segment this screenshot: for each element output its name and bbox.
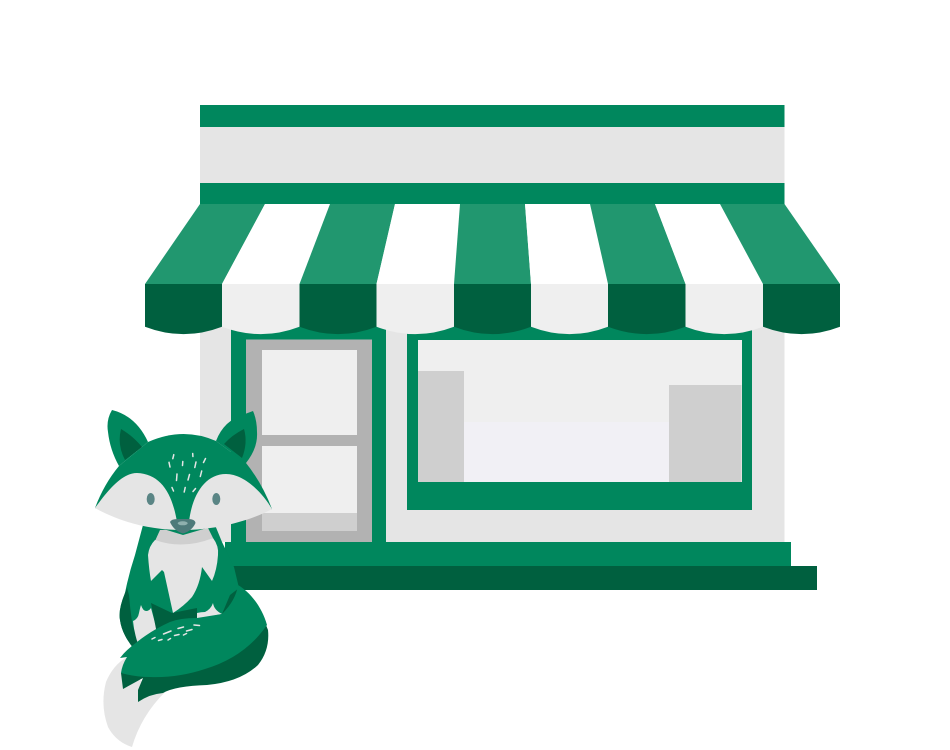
fox head — [95, 434, 272, 535]
fox chest fur — [148, 528, 218, 613]
striped awning — [145, 204, 840, 334]
fox right ear — [216, 411, 257, 463]
door — [231, 320, 386, 542]
fox body — [120, 525, 239, 650]
shop window — [407, 320, 752, 510]
fox nose — [170, 519, 196, 534]
fox eyes — [147, 493, 220, 505]
building: shop wall and fascia — [200, 105, 784, 542]
shop steps — [225, 542, 817, 590]
fox tail — [103, 585, 268, 747]
fox mascot — [95, 410, 272, 747]
fox left ear — [108, 410, 148, 466]
fox tail markings — [152, 625, 200, 640]
fox forehead markings — [169, 454, 206, 492]
fox face — [95, 473, 272, 530]
